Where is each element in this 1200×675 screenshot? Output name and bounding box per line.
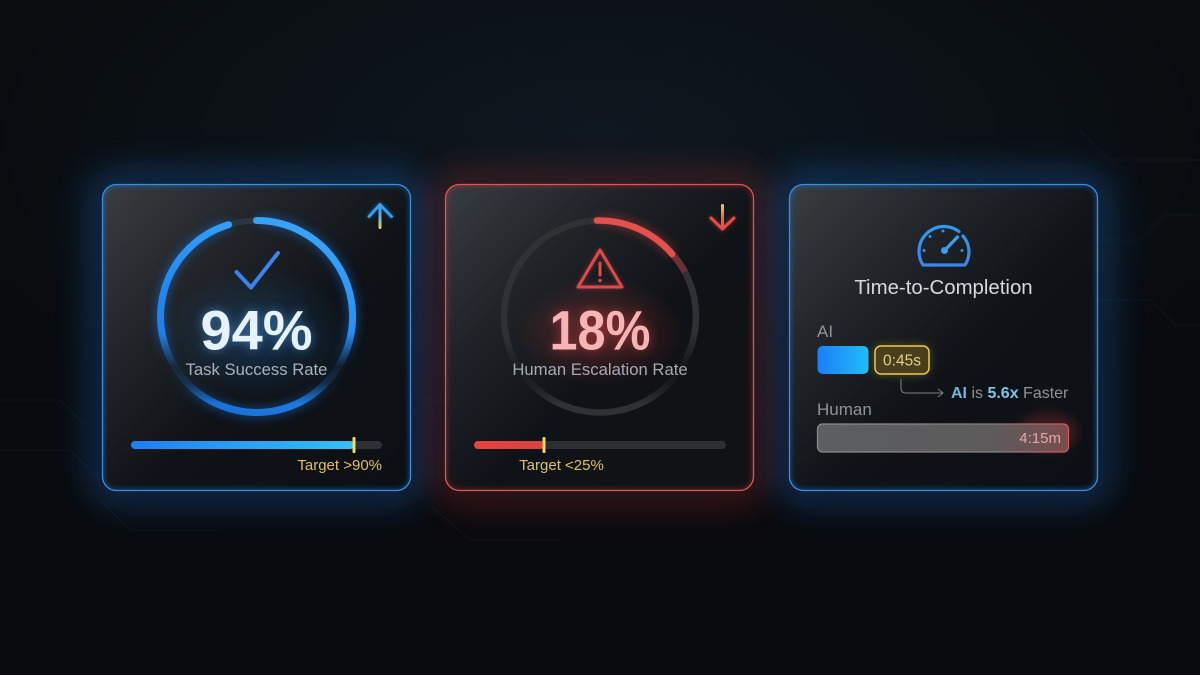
progress ring	[504, 220, 696, 412]
target label: Target >90%	[297, 457, 382, 474]
panel: time-to-completion	[790, 184, 1098, 490]
label: AI: AI	[817, 322, 833, 341]
panel: human escalation rate	[446, 184, 754, 490]
heading: Time-to-Completion	[854, 277, 1033, 299]
progress bar	[131, 437, 382, 453]
icon: speedometer	[919, 226, 969, 265]
icon: up arrow	[369, 204, 392, 229]
arrow	[901, 379, 943, 397]
label: task success rate: Task Success Rate	[186, 360, 327, 379]
progress bar	[474, 437, 726, 453]
progress ring	[160, 220, 353, 412]
number glow	[515, 277, 685, 387]
callout: AI is 5.6x faster: AI is 5.6x Faster	[951, 385, 1069, 402]
label: human: Human	[817, 400, 872, 419]
card glows	[102, 184, 1098, 491]
label: human escalation rate: Human Escalation Rate	[512, 360, 688, 379]
AI bar	[818, 346, 868, 374]
human bar: 4:15m	[1019, 430, 1061, 447]
number glow	[161, 267, 351, 403]
icon: check mark	[236, 253, 278, 288]
human bar	[818, 412, 1078, 452]
icon: warning triangle	[578, 250, 622, 287]
value: 94%: 94%	[200, 298, 313, 362]
AI time badge	[875, 346, 929, 374]
AI time badge: 0:45s	[883, 352, 921, 370]
value: 18%: 18%	[550, 298, 650, 362]
target label: Target <25%	[519, 457, 604, 474]
icon: down arrow	[711, 204, 734, 229]
panel: task success rate	[102, 184, 410, 490]
